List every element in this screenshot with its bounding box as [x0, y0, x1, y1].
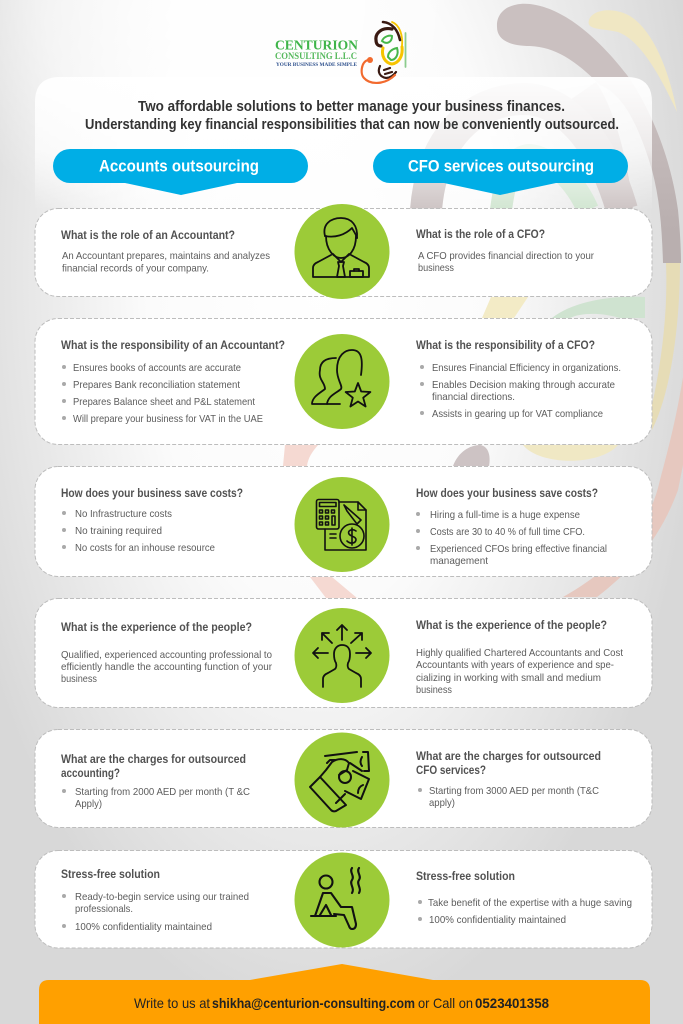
logo wordmark: YOUR BUSINESS MADE SIMPLE	[276, 62, 357, 68]
left text: accounts cost savings: No Infrastructure costs	[75, 508, 172, 520]
panel: charges	[35, 730, 652, 828]
icon: hand with money	[294, 732, 390, 828]
left text: accounting charges: accounting?	[61, 766, 120, 780]
left text: stress-free accounts: Ready-to-begin service using our trained	[75, 891, 249, 903]
left text: accounts cost savings	[61, 486, 243, 554]
left text: responsibility of an Accountant: Will prepare your business for VAT in the UAE	[73, 413, 263, 425]
left text: role of an Accountant: An Accountant prepares, maintains and analyzes	[62, 250, 270, 262]
left text: accounting experience: Qualified, experienced accounting professional to	[61, 649, 272, 661]
logo wordmark	[275, 38, 358, 68]
right text: responsibility of a CFO: What is the responsibility of a CFO?	[416, 338, 595, 352]
right text: responsibility of a CFO: Ensures Financial Efficiency in organizations.	[432, 362, 621, 374]
right text: CFO experience: What is the experience of the people?	[416, 618, 607, 632]
left text: stress-free accounts	[61, 867, 249, 933]
right text: CFO cost savings: Hiring a full-time is a huge expense	[430, 509, 580, 521]
left text: accounting charges	[61, 752, 250, 810]
header: CFO services outsourcing: CFO services outsourcing	[408, 156, 594, 176]
left text: role of an Accountant: What is the role of an Accountant?	[61, 228, 235, 242]
right text: responsibility of a CFO: financial directions.	[432, 391, 515, 403]
left text: stress-free accounts: Stress-free solution	[61, 867, 160, 881]
left text: accounting experience: What is the experience of the people?	[61, 620, 252, 634]
right text: responsibility of a CFO	[416, 338, 621, 420]
panel: role	[35, 204, 652, 299]
footer contact banner: or Call on	[418, 995, 473, 1011]
top intro panel	[35, 77, 652, 210]
left text: role of an Accountant	[61, 228, 270, 274]
footer contact banner: Write to us at	[134, 995, 210, 1011]
right text: stress-free CFO: Stress-free solution	[416, 869, 515, 883]
left text: accounting charges: What are the charges for outsourced	[61, 752, 246, 766]
panel: stress-free	[35, 850, 652, 948]
headline: Understanding key financial responsibilities that can now be conveniently outsourced.	[85, 117, 619, 133]
icon: accountant	[294, 204, 390, 299]
right text: CFO cost savings: Costs are 30 to 40 % of full time CFO.	[430, 526, 585, 538]
right text: CFO cost savings: How does your business save costs?	[416, 486, 598, 500]
right text: role of a CFO: A CFO provides financial direction to your	[418, 250, 594, 262]
left text: accounts cost savings: No training required	[75, 525, 162, 537]
left text: responsibility of an Accountant: Ensures books of accounts are accurate	[73, 362, 241, 374]
logo butterfly mark	[362, 22, 406, 83]
icon: calculator and invoice	[294, 477, 390, 572]
right text: CFO cost savings	[416, 486, 607, 567]
right text: role of a CFO: business	[418, 262, 454, 274]
right text: stress-free CFO	[416, 869, 632, 926]
left text: responsibility of an Accountant: Prepares Balance sheet and P&L statement	[73, 396, 255, 408]
logo wordmark: CONSULTING L.L.C	[275, 52, 357, 62]
left text: role of an Accountant: financial records of your company.	[62, 262, 209, 274]
right text: role of a CFO: What is the role of a CFO?	[416, 227, 545, 241]
left text: accounting experience: efficiently handle the accounting function of your	[61, 661, 272, 673]
right text: CFO charges: CFO services?	[416, 763, 486, 777]
left text: accounting charges: Apply)	[75, 798, 102, 810]
header: CFO services outsourcing	[373, 149, 628, 195]
right text: responsibility of a CFO: Assists in gearing up for VAT compliance	[432, 408, 603, 420]
footer contact banner	[39, 964, 650, 1024]
left text: responsibility of an Accountant: What is the responsibility of an Accountant?	[61, 338, 285, 352]
icon: person with arrows	[294, 608, 390, 703]
icon: people with star	[294, 334, 390, 429]
header: Accounts outsourcing: Accounts outsourcing	[99, 156, 259, 176]
right text: CFO charges: What are the charges for outsourced	[416, 749, 601, 763]
right text: CFO cost savings: Experienced CFOs bring effective financial	[430, 543, 607, 555]
logo	[275, 22, 406, 83]
headline: Two affordable solutions to better manage your business finances.	[138, 99, 565, 115]
left text: accounting experience: business	[61, 673, 97, 685]
headline	[85, 99, 619, 133]
right text: stress-free CFO: 100% confidentiality maintained	[429, 914, 566, 926]
header: Accounts outsourcing	[53, 149, 308, 195]
left text: accounts cost savings: No costs for an inhouse resource	[75, 542, 215, 554]
right text: CFO experience: Highly qualified Chartered Accountants and Cost	[416, 647, 623, 659]
footer contact banner: 0523401358	[475, 995, 549, 1011]
panel: responsibility	[35, 318, 652, 444]
left text: stress-free accounts: 100% confidentiality maintained	[75, 921, 212, 933]
right text: CFO cost savings: management	[430, 555, 488, 567]
panel: saving costs	[35, 466, 652, 576]
right text: role of a CFO	[416, 227, 594, 274]
left text: accounting experience	[61, 620, 272, 685]
right text: CFO charges	[416, 749, 601, 809]
panel: experience	[35, 598, 652, 708]
decorative swirls	[283, 4, 683, 598]
right text: CFO charges: Starting from 3000 AED per month (T&C	[429, 785, 599, 797]
left text: accounts cost savings: How does your business save costs?	[61, 486, 243, 500]
footer contact banner: shikha@centurion-consulting.com	[212, 995, 415, 1011]
left text: accounting charges: Starting from 2000 AED per month (T &C	[75, 786, 250, 798]
left text: responsibility of an Accountant	[61, 338, 285, 425]
right text: CFO experience	[416, 618, 623, 696]
icon: relaxing person in sauna	[294, 852, 390, 948]
right text: CFO experience: business	[416, 684, 452, 696]
right text: stress-free CFO: Take benefit of the expertise with a huge saving	[428, 897, 632, 909]
right text: CFO experience: Accountants with years of experience and spe-	[416, 659, 614, 671]
logo wordmark: CENTURION	[275, 38, 358, 54]
left text: stress-free accounts: professionals.	[75, 903, 133, 915]
left text: responsibility of an Accountant: Prepares Bank reconciliation statement	[73, 379, 240, 391]
right text: responsibility of a CFO: Enables Decision making through accurate	[432, 379, 615, 391]
right text: CFO charges: apply)	[429, 797, 455, 809]
right text: CFO experience: cializing in working with small and medium	[416, 672, 601, 684]
